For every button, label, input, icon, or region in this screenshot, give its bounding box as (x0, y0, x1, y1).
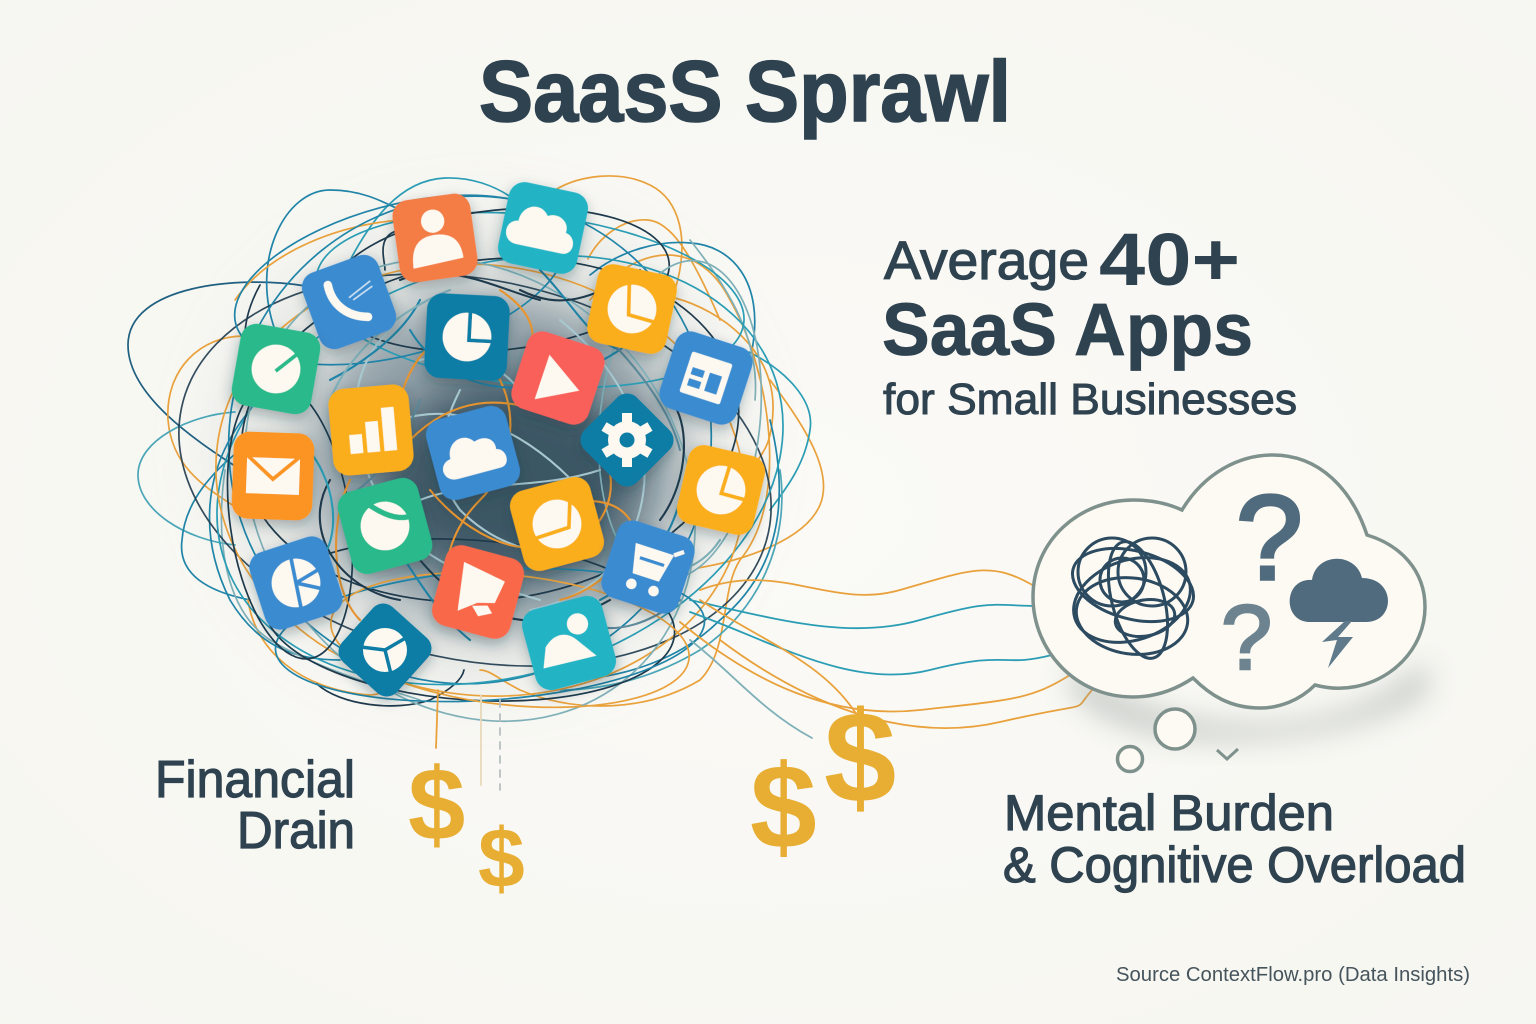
dollar signs: $ (478, 811, 525, 905)
app icon: blue layout (655, 327, 757, 429)
label: financial drain: Drain (237, 802, 355, 860)
icon: small question mark: ? (1221, 587, 1272, 689)
dollar signs: $ (750, 740, 817, 874)
app icon: red-orange speech (428, 542, 528, 642)
dollar signs: $ (408, 747, 465, 862)
cloud outline (1033, 455, 1425, 708)
label: mental burden: Mental Burden (1004, 785, 1334, 841)
cloud shadow (1070, 660, 1430, 741)
app icon: dark blue pie three (333, 598, 437, 702)
app icon: amber bars (327, 383, 415, 477)
app icon: blue pie (245, 532, 347, 634)
app icon: teal cloud (495, 179, 591, 277)
statistic heading (882, 218, 1297, 424)
app icon: dark blue gear (575, 388, 679, 492)
dollar signs (408, 684, 896, 905)
app icon: amber pie two (506, 473, 608, 575)
app icon: amber chart (584, 261, 680, 357)
tangled inner wires (300, 270, 720, 640)
app icon: dark blue pie (423, 292, 511, 382)
app icon: green arc (334, 474, 436, 578)
app icon: amber pie (674, 442, 768, 538)
statistic heading: 40+ (1099, 218, 1240, 301)
icon: storm cloud (1290, 559, 1388, 668)
statistic heading: for Small Businesses (883, 375, 1297, 424)
label: mental burden (1003, 785, 1466, 893)
tangle shadow (225, 225, 735, 675)
app icon: teal person (518, 592, 620, 694)
source note: Source ContextFlow.pro (Data Insights) (1116, 964, 1470, 986)
title: SaasS Sprawl (479, 44, 1011, 140)
thought bubble small (1118, 746, 1142, 772)
label: financial drain: Financial (155, 751, 355, 809)
icon: tangled knot (1063, 535, 1202, 665)
app icon: blue cart (597, 516, 699, 618)
label: financial drain (155, 751, 355, 860)
app icon: blue phone (297, 250, 401, 354)
dollar signs: $ (824, 684, 896, 830)
icon: large question mark: ? (1236, 471, 1303, 605)
app icon: green dial (229, 321, 323, 417)
wires flowing to the cloud (436, 570, 1092, 790)
app icon: red play (507, 327, 609, 429)
tangled outer wires (128, 108, 839, 813)
app icon: orange mail (231, 431, 315, 521)
thought bubble large (1155, 709, 1195, 749)
thought cloud (1033, 455, 1430, 772)
app icon: blue cloud (422, 402, 524, 504)
statistic heading: SaaS Apps (882, 288, 1253, 371)
statistic heading: Average (884, 231, 1089, 291)
tangled app cluster (128, 108, 1092, 813)
chevron mark (1217, 749, 1238, 759)
app icon: orange person (390, 192, 480, 284)
label: mental burden: & Cognitive Overload (1003, 837, 1466, 893)
